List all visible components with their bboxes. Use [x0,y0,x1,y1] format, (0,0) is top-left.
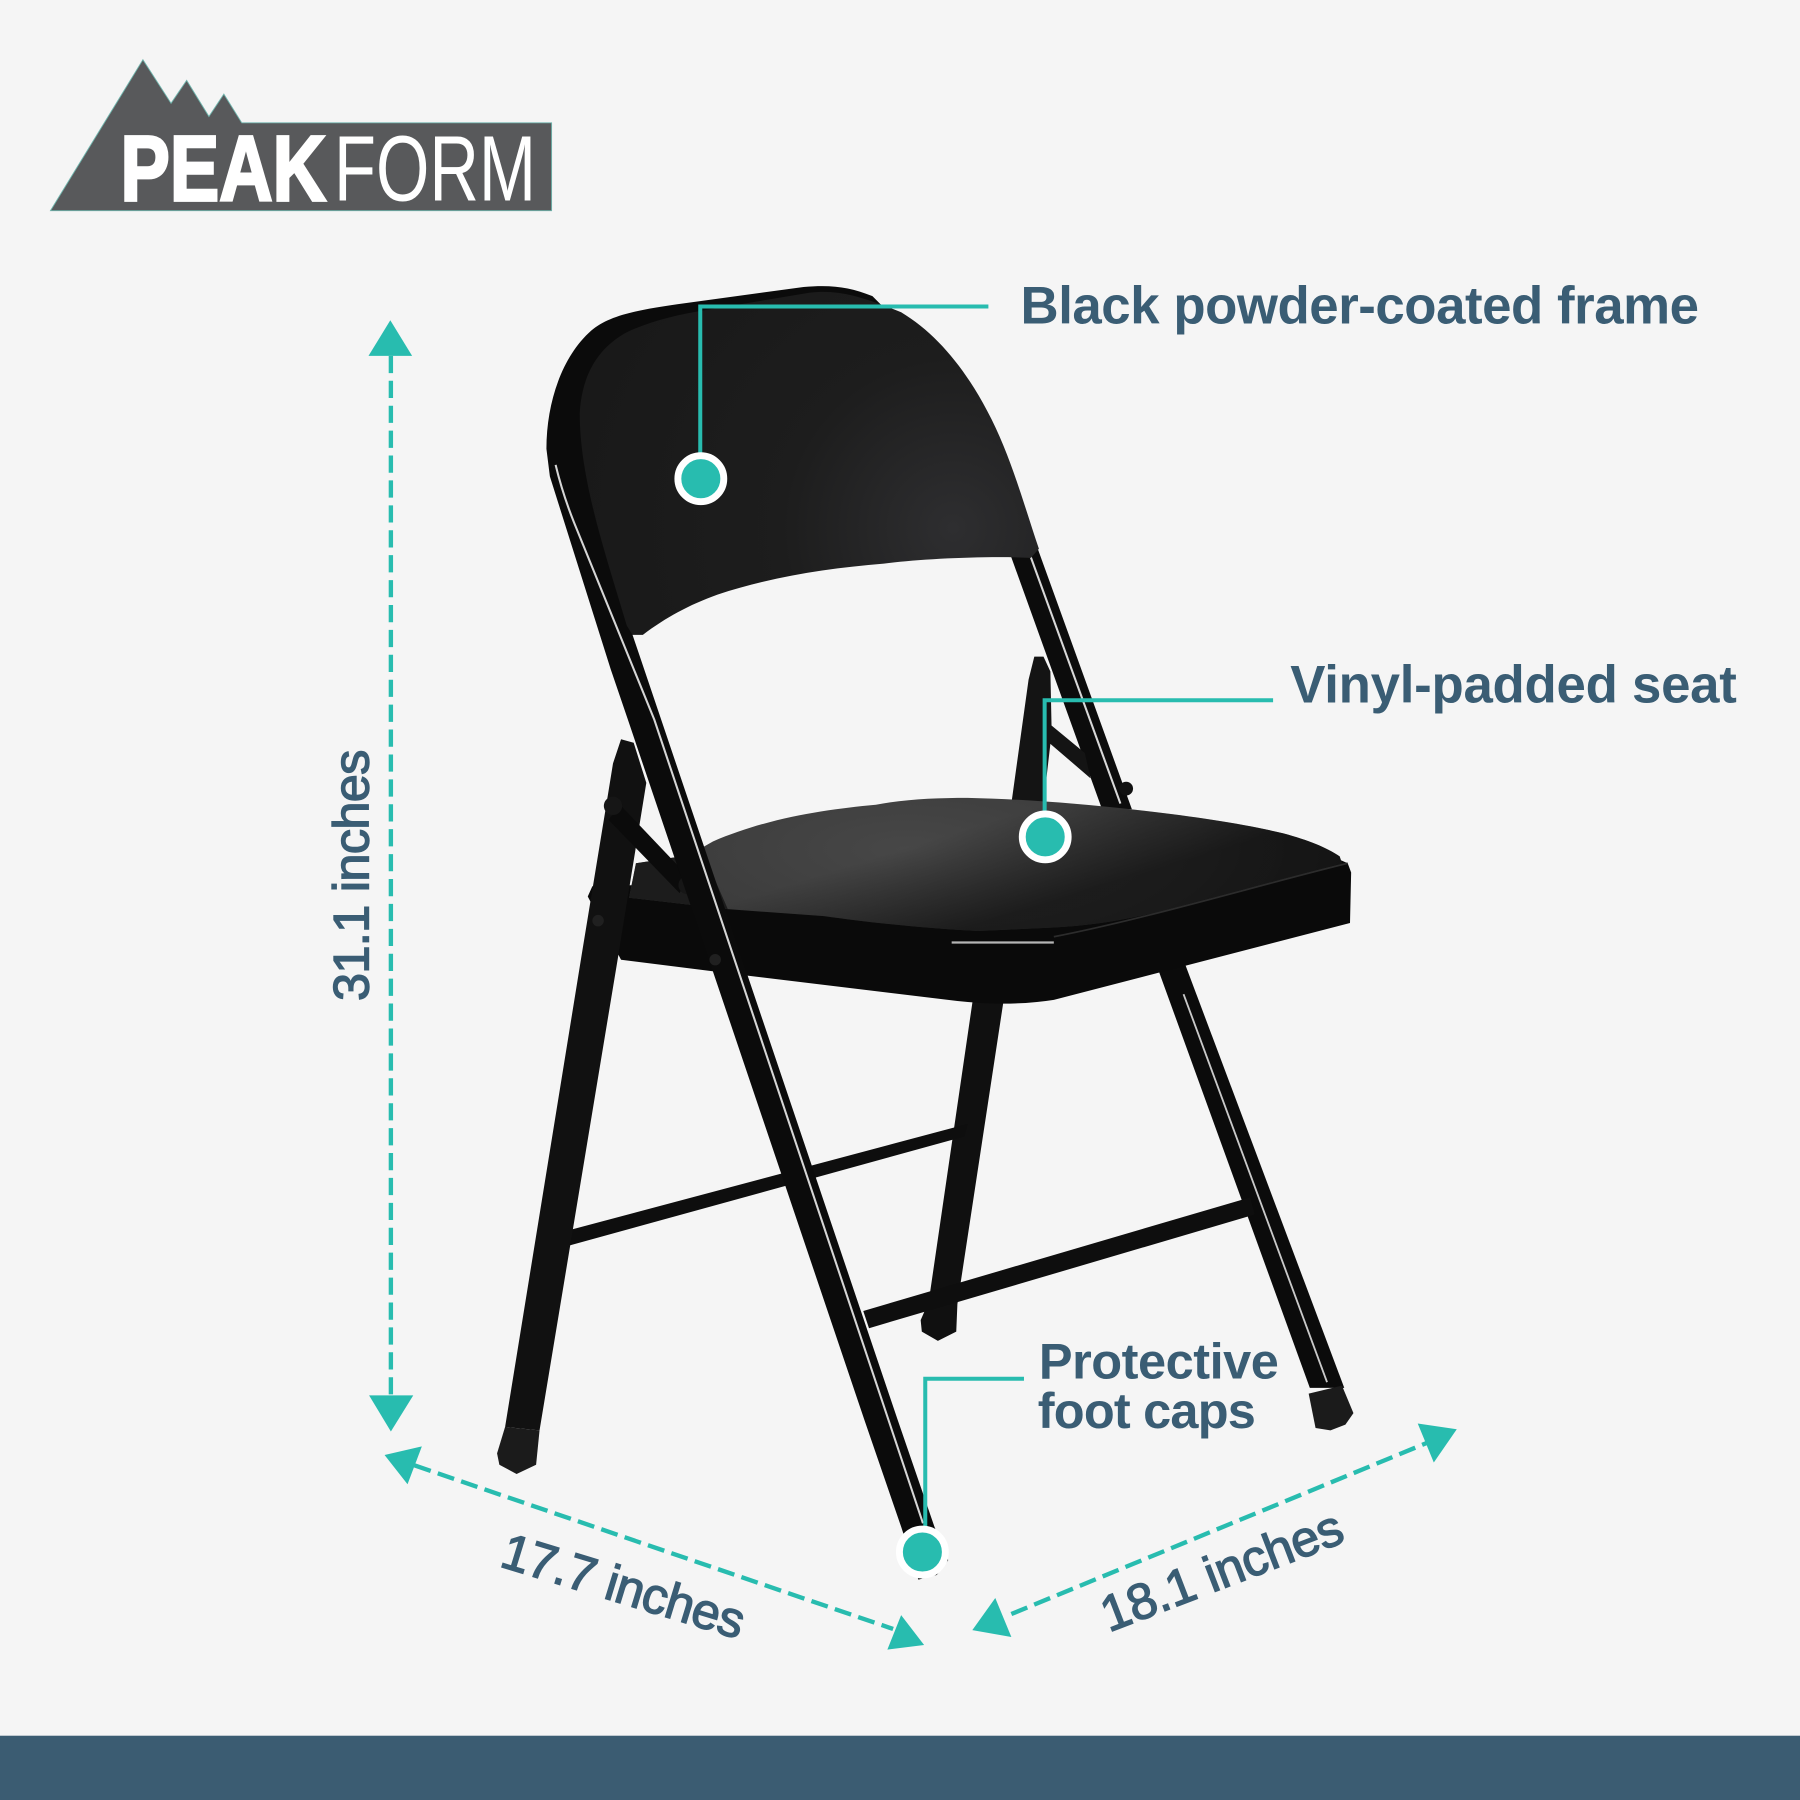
marker dot [1022,814,1068,860]
folding chair [497,286,1353,1580]
label: 17.7 inches [495,1522,752,1650]
label: Protective [1039,1333,1279,1390]
label [1038,1333,1279,1439]
marker dot [678,456,724,502]
logo: PeakForm [51,60,552,220]
seat pan [588,836,1351,1004]
callout: seat [1022,656,1737,860]
seat pad [629,798,1342,931]
label: 31.1 inches [322,750,379,1001]
logo: PeakForm: FORM [334,116,536,220]
marker dot [899,1529,945,1575]
backrest frame and main tube [546,286,948,1580]
logo wordmark: PEAK [121,116,326,220]
label: Black powder-coated frame [1021,277,1699,336]
label: foot caps [1038,1382,1256,1439]
dimension: width [972,1423,1457,1643]
left rear leg and bracket [497,739,697,1474]
label: 18.1 inches [1092,1498,1351,1643]
dimension: height [322,320,413,1432]
arrow [385,1446,924,1650]
arrow [368,320,413,1432]
leader line [1045,700,1273,813]
leader line [925,1379,1024,1529]
leader line [700,307,988,455]
front crossbar [863,1197,1255,1328]
callout: frame [678,277,1699,502]
backrest pad [580,292,1039,635]
right upright and bracket [1009,549,1133,809]
arrow [972,1423,1457,1637]
logo mountain shape [51,60,552,211]
rear right leg [921,987,1006,1341]
label: Vinyl-padded seat [1290,656,1737,715]
rear crossbar [569,1124,968,1246]
dimension: depth [385,1446,924,1650]
callout: foot caps [899,1333,1279,1575]
front right leg [1148,936,1353,1430]
footer band [0,1736,1800,1800]
